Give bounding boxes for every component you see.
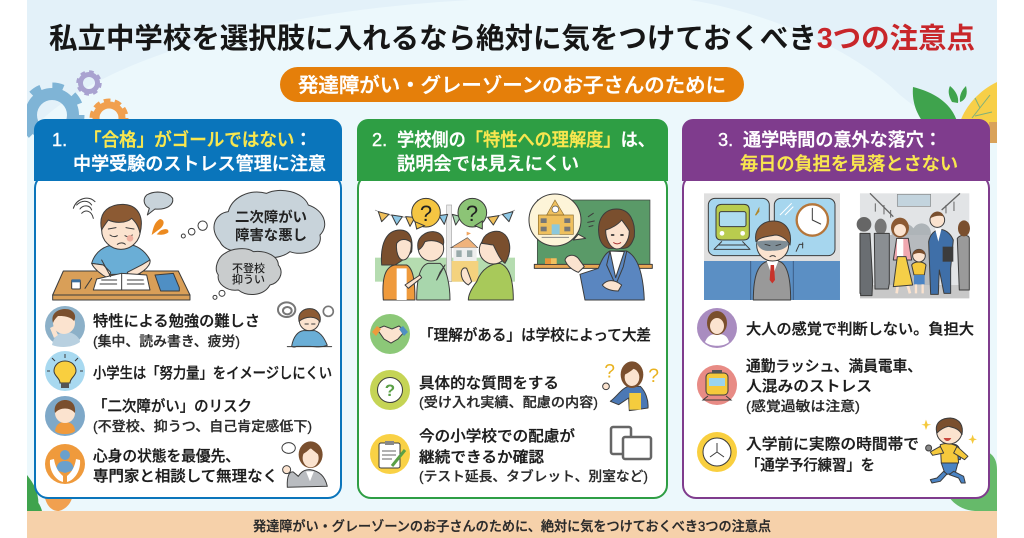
list item: not adult sense: 大人の感覚で判断しない。負担大 — [746, 320, 974, 338]
list item: continuity of accommodations — [370, 427, 648, 484]
icon: question bubble: ? — [385, 381, 395, 400]
list item: self care: 専門家と相談して無理なく — [93, 468, 278, 485]
list item: study difficulty: 特性による勉強の難しさ — [93, 312, 260, 330]
list item: understanding varies — [370, 314, 651, 354]
icon: decorative gears — [23, 72, 126, 144]
footer band: 発達障がい・グレーゾーンのお子さんのために、絶対に気をつけておくべき3つの注意点 — [253, 518, 771, 534]
list item: effort: 小学生は「努力量」をイメージしにくい — [93, 365, 332, 382]
question marks — [420, 201, 478, 226]
icon: decorative leaves bottom left — [27, 475, 72, 511]
list item: rush stress — [697, 357, 922, 414]
panel: 3 commute time — [682, 119, 990, 498]
question marks: ? — [420, 201, 432, 226]
illustration: running boy — [921, 418, 977, 483]
list item: study difficulty — [45, 306, 260, 349]
panel heading: 中学受験のストレス管理に注意 — [73, 154, 326, 174]
illustration: small counselor — [282, 441, 327, 487]
panel: 1 stress management — [34, 119, 342, 498]
list item: practice commute: 「通学予行練習」を — [746, 457, 875, 474]
panel heading: 2. — [372, 130, 387, 150]
list item: effort — [45, 351, 332, 391]
panel heading: 通学時間の意外な落穴： — [743, 130, 942, 150]
icon: clock — [697, 432, 737, 472]
panel heading — [718, 130, 958, 174]
cloud text — [232, 208, 307, 286]
panel heading: 3. — [718, 130, 733, 150]
illustration: boy studying with thought clouds — [53, 190, 325, 300]
panel heading: 「合格」がゴールではない： — [84, 129, 312, 150]
footer band — [27, 511, 997, 538]
list item: continuity of accommodations: 今の小学校での配慮が — [419, 427, 575, 445]
panel: 2 school understanding — [357, 119, 668, 498]
list item: rush stress: 人混みのストレス — [746, 378, 872, 395]
illustration: woman thinking with folder — [603, 361, 659, 411]
cloud text: 障害な悪し — [235, 227, 307, 244]
panel heading: 学校側の「特性への理解度」は、 — [397, 130, 655, 150]
illustration: small boy with worry — [278, 302, 333, 347]
list item: secondary disability — [45, 396, 312, 436]
cloud text: 二次障がい — [235, 208, 307, 226]
list item: not adult sense — [697, 308, 974, 348]
illustration: tired commuter on train — [704, 193, 840, 300]
list item: self care — [45, 444, 278, 485]
list item: ask concrete questions: (受け入れ実績、配慮の内容) — [419, 394, 598, 410]
list item: rush stress: 通勤ラッシュ、満員電車、 — [746, 357, 922, 375]
list item: continuity of accommodations: 継続できるか確認 — [419, 448, 544, 466]
list item: continuity of accommodations: (テスト延長、タブレット、別室など) — [419, 468, 648, 484]
icon: woman — [697, 308, 737, 348]
list item: ask concrete questions: 具体的な質問をする — [419, 374, 559, 392]
icon: light bulb — [45, 351, 85, 391]
panel heading: 1. — [52, 130, 67, 150]
list item: secondary disability: (不登校、抑うつ、自己肯定感低下) — [93, 418, 312, 434]
subtitle pill — [280, 67, 744, 102]
panel heading — [52, 129, 326, 174]
cloud text: 不登校 — [232, 261, 265, 275]
list item: understanding varies: 「理解がある」は学校によって大差 — [419, 326, 651, 344]
icon: train — [697, 365, 737, 405]
question marks: ? — [466, 201, 478, 226]
list item: study difficulty: (集中、読み書き、疲労) — [93, 333, 240, 349]
list item: practice commute — [697, 432, 919, 474]
illustration: teacher at blackboard — [529, 194, 652, 300]
illustration: woman thinking with folder: ? — [648, 366, 659, 387]
illustration: parents and child at school briefing — [375, 198, 515, 300]
icon: clipboard — [370, 434, 410, 474]
list item: secondary disability: 「二次障がい」のリスク — [93, 397, 252, 415]
list item: rush stress: (感覚過敏は注意) — [746, 398, 860, 414]
title: 私立中学校を選択肢に入れるなら絶対に気をつけておくべき3つの注意点 — [49, 23, 975, 55]
icon: worried child — [45, 396, 85, 436]
list item: ask concrete questions — [370, 370, 598, 410]
icon: question bubble — [370, 370, 410, 410]
icon: handshake — [370, 314, 410, 354]
panel heading — [372, 130, 655, 174]
list item: practice commute: 入学前に実際の時間帯で — [746, 436, 919, 453]
cloud text: 抑うい — [232, 272, 265, 286]
icon: hands holding person — [45, 444, 85, 484]
panel heading: 説明会では見えにくい — [397, 154, 579, 174]
icon: decorative leaf bottom right — [949, 452, 997, 511]
illustration: woman thinking with folder: ? — [604, 361, 615, 382]
icon: decorative leaves top right — [913, 82, 997, 143]
icon: tired child — [45, 306, 85, 347]
list item: self care: 心身の状態を最優先、 — [93, 447, 240, 465]
icon: tablets — [611, 427, 651, 459]
panel heading: 毎日の負担を見落とさない — [740, 154, 958, 174]
subtitle pill: 発達障がい・グレーゾーンのお子さんのために — [298, 74, 726, 97]
illustration: crowded train with family — [857, 193, 970, 298]
